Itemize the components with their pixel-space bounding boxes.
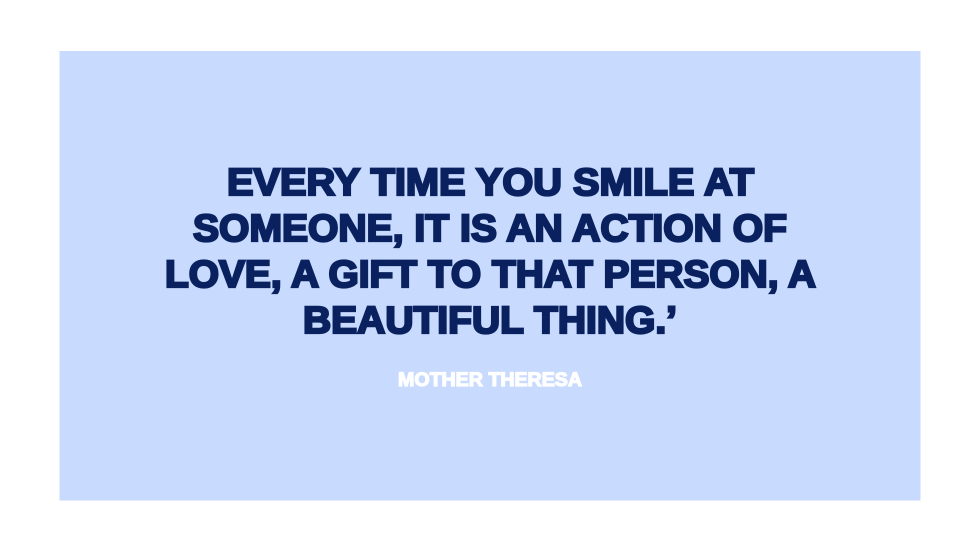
attribution: MOTHER THERESA: [398, 370, 582, 391]
quote text: BEAUTIFUL THING.’: [303, 300, 677, 342]
quote text: SOMEONE, IT IS AN ACTION OF: [193, 208, 787, 250]
quote text: [165, 162, 816, 342]
quote text: EVERY TIME YOU SMILE AT: [227, 162, 754, 204]
panel: quote background: [60, 51, 920, 500]
quote text: LOVE, A GIFT TO THAT PERSON, A: [165, 254, 816, 296]
